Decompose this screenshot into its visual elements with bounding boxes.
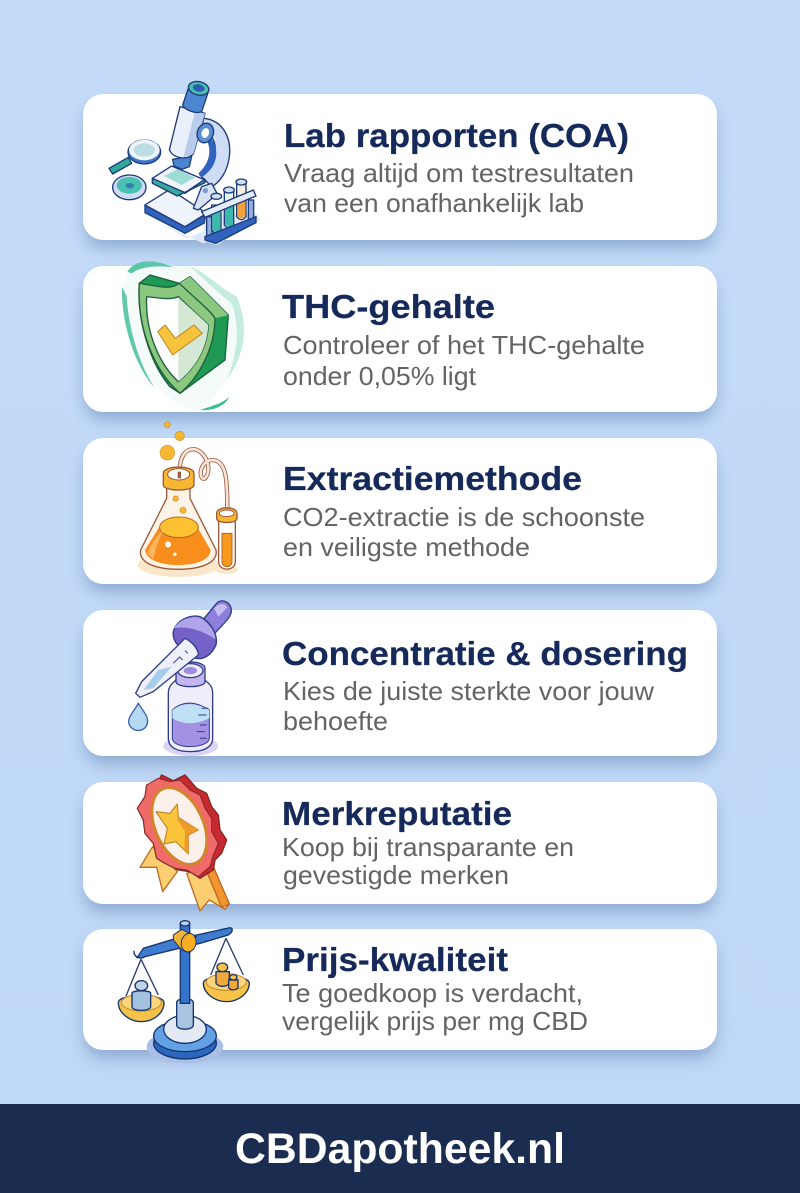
text: price quality xyxy=(282,942,588,1036)
text: brand reputation: Merkreputatie xyxy=(282,796,512,833)
footer bar xyxy=(0,1104,800,1193)
icon: shield with check xyxy=(122,261,244,410)
panel: brand reputation card xyxy=(83,782,717,904)
text: lab reports xyxy=(284,118,634,218)
panel: lab reports card xyxy=(83,94,717,240)
text: lab reports: Vraag altijd om testresultaten xyxy=(284,158,634,188)
text: THC content: Controleer of het THC-gehalte xyxy=(283,330,645,360)
icon: flask with tube xyxy=(138,422,238,577)
text: extraction method xyxy=(283,461,645,562)
text: concentration and dosage: Concentratie & dosering xyxy=(282,636,688,673)
panel: THC card xyxy=(83,266,717,412)
text: THC content xyxy=(282,289,645,391)
text: brand reputation xyxy=(282,796,574,890)
text: extraction method: Extractiemethode xyxy=(283,461,582,498)
text: price quality: Prijs-kwaliteit xyxy=(282,942,508,979)
text: price quality: vergelijk prijs per mg CBD xyxy=(282,1006,588,1036)
footer brand name: CBDapotheek.nl xyxy=(235,1125,565,1173)
panel: price quality card xyxy=(83,929,717,1050)
icon: balance scale xyxy=(118,921,249,1063)
text: price quality: Te goedkoop is verdacht, xyxy=(282,978,583,1008)
text: THC content: THC-gehalte xyxy=(282,289,495,326)
text: lab reports: Lab rapporten (COA) xyxy=(284,118,629,155)
text: brand reputation: Koop bij transparante en xyxy=(282,832,574,862)
text: THC content: onder 0,05% ligt xyxy=(283,361,477,391)
text: concentration and dosage xyxy=(282,636,688,736)
icon: dropper and bottle xyxy=(129,601,231,756)
text: concentration and dosage: Kies de juiste sterkte voor jouw xyxy=(283,676,654,706)
panel: extraction card xyxy=(83,438,717,584)
icon: award rosette xyxy=(137,775,229,911)
text: lab reports: van een onafhankelijk lab xyxy=(284,188,584,218)
text: brand reputation: gevestigde merken xyxy=(283,860,509,890)
icon: microscope with magnifier and test tubes xyxy=(109,80,260,245)
text: concentration and dosage: behoefte xyxy=(283,706,388,736)
text: extraction method: CO2-extractie is de schoonste xyxy=(283,502,645,532)
text: extraction method: en veiligste methode xyxy=(283,532,530,562)
panel: concentration card xyxy=(83,610,717,756)
